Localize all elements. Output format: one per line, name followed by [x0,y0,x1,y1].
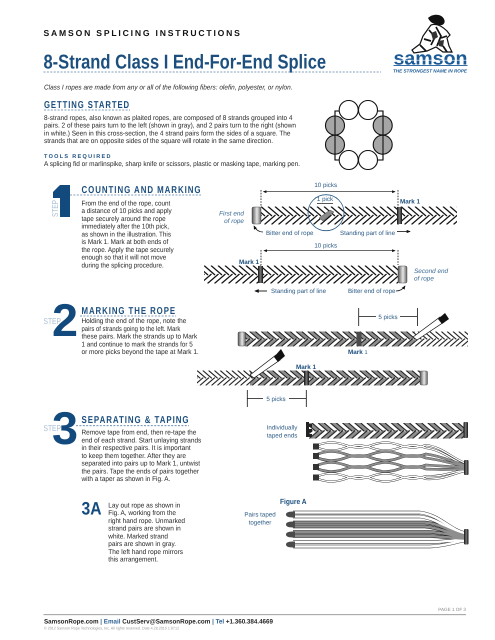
dimension: 5 picks: 5 picks [266,396,286,403]
rope [245,332,415,346]
end cap [464,529,468,544]
dimension: 10 picks [261,182,398,207]
icon: marker pen [413,313,449,340]
label: first end: of rope [224,218,244,225]
tools heading: TOOLS REQUIRED [44,154,111,160]
taped ends [313,444,319,480]
diagram: taped rope [267,422,468,440]
label: first end: First end [219,210,244,217]
heading: SEPARATING & TAPING [82,415,190,426]
step number: 3A [82,498,102,518]
rope [197,370,250,386]
label: pairs taped together: together [249,519,271,526]
label: bitter end [348,286,405,295]
body text: immediately after the 10th pick, [82,224,169,231]
logo: Samson [393,15,468,74]
body text: tape securely around the rope [82,216,166,223]
label: standing part: Standing part of line [271,288,327,295]
page number: PAGE 1 OF 3 [438,607,466,612]
diagram: marking rope, second end [197,349,428,407]
body text: pairs. 2 of these pairs turn to the left (shown in gray), and 2 pairs turn to the right (shown [44,123,296,130]
label: pairs taped together: Pairs taped [244,511,276,518]
mark band [258,266,263,283]
label: bitter end: Bitter end of rope [348,288,396,295]
body text [44,115,296,145]
step 1 [52,185,201,269]
body text: or more picks beyond the tape at Mark 1. [82,349,199,356]
diagram: unlaid strand pairs [313,442,468,482]
body text: with a taper as shown in Fig. A. [81,476,170,483]
body text: is Mark 1. Mark at both ends of [82,239,168,246]
body text: the rope. Apply the tape securely [82,247,174,254]
label: mark 1: Mark 1 [400,198,420,205]
body text: this arrangement. [108,556,158,564]
end cap [464,422,468,438]
body text: to keep them together. After they are [82,453,186,460]
diagram: second end of rope [204,243,449,295]
step 3 [44,402,202,483]
body text: Holding the end of the rope, note the [82,318,186,325]
label: standing part: Standing part of line [340,230,396,237]
body text: end of each strand. Start unlaying strands [82,437,202,444]
dimension: 10 picks [261,243,398,265]
heading: COUNTING AND MARKING [82,185,202,196]
step label: STEP [44,316,61,326]
dimension: 5 picks [247,390,306,407]
body text: The left hand rope mirrors [108,549,184,556]
step label: STEP [50,200,60,217]
body text: separated into pairs up to Mark 1, untwist [82,461,200,468]
white outer strands [318,442,465,482]
label: second end [414,268,449,282]
taped tips [286,512,295,548]
title: 8-Strand Class I End-For-End Splice [44,52,326,74]
body text [82,200,174,269]
taped ends [306,422,312,437]
body text: 8-strand ropes, also known as plaited ropes, are composed of 8 strands grouped into 4 [44,115,293,122]
mark band [356,332,362,346]
body text [81,430,202,483]
mark band [397,207,402,224]
rope [261,206,457,224]
body text: pairs of strands going to the left. Mark [82,326,181,333]
body text: as shown in the illustration. This [82,231,172,238]
end cap [238,332,246,346]
section: getting started [44,100,300,168]
body text: strand pairs are shown in [108,526,181,532]
step number: 3 [52,402,78,454]
strand pairs [293,512,465,546]
tools text: A splicing fid or marlinspike, sharp knife or scissors, plastic or masking tape, marking pen. [44,161,300,168]
wordmark: samson [394,49,468,70]
dimension: 5 picks [359,308,418,326]
header label: SAMSON SPLICING INSTRUCTIONS [44,28,242,38]
body text: a distance of 10 picks and apply [82,208,172,215]
footer contact: SamsonRope.com | Email CustServ@SamsonRope.com | Tel +1.360.384.4669 [44,618,273,625]
label: bitter end [254,226,314,237]
footer copyright: © 2012 Samson Rope Technologies, Inc. All rights reserved. Date 4.28.2015 1:0712 [44,626,179,631]
body text: Remove tape from end, then re-tape the [82,430,196,437]
diagram: marking rope, first end [238,308,468,356]
one pick callout: 1 pick [317,196,334,203]
label: bitter end: Bitter end of rope [266,230,314,237]
rope [309,423,464,439]
diagram: cross-section [326,100,392,170]
body text: From the end of the rope, count [82,200,170,207]
body text: the pairs. Tape the ends of pairs together [82,468,200,475]
body text [107,502,185,564]
label: individually taped ends [267,424,298,440]
gray inner strands [318,452,465,472]
step number [53,185,70,217]
body text: these pairs. Mark the strands up to Mark [82,334,198,341]
body text: right hand rope. Unmarked [108,518,185,525]
intro line: Class I ropes are made from any or all of the following fibers: olefin, polyester, or nylon. [44,84,293,91]
mark band [304,371,309,385]
label: mark 1: Mark 1 [348,349,368,356]
label: first end [219,210,244,225]
body text: Lay out rope as shown in [108,502,180,509]
label: individually taped ends: taped ends [267,432,297,440]
end cap [252,207,261,224]
diagram: figure A [286,512,468,548]
label: mark 1: Mark 1 [239,259,259,266]
end cap [420,371,428,385]
icon: Hercules figure [412,15,452,53]
body text: strands that are on opposite sides of the square will rotate in the same direction. [44,138,273,145]
label: individually taped ends: Individually [267,424,298,432]
figure A heading: Figure A [280,497,307,506]
label: second end: Second end [414,268,449,275]
body text: enough so that it will not move [82,255,166,262]
label: mark 1: Mark 1 [296,364,316,371]
body text: white. Marked strand [107,533,168,540]
diagram: first end of rope [219,182,457,237]
body text: Fig. A, working from the [108,510,176,517]
tagline: THE STRONGEST NAME IN ROPE [393,69,468,74]
icon: marker pen [250,349,285,378]
dimension: 5 picks: 5 picks [378,314,398,321]
step label: STEP [44,423,61,433]
body text: 1 and continue to mark the strands for 5 [82,342,193,348]
step number: 1 [44,175,76,227]
body text: in their respective pairs. It is important [82,445,191,452]
heading: MARKING THE ROPE [82,306,176,317]
step 2 [44,294,199,356]
body text: during the splicing procedure. [82,262,164,269]
rope [204,266,398,284]
body text: pairs are shown in gray. [108,541,176,548]
end cap [398,266,407,283]
label: second end: of rope [414,276,434,282]
dimension: 10 picks: 10 picks [314,182,337,189]
label: pairs taped together [244,511,276,526]
body text: in white.) Seen in this cross-section, the 4 strand pairs form the sides of a square. The [44,130,291,137]
end cap [464,460,468,475]
dimension: 10 picks: 10 picks [314,243,337,250]
step 3A [82,498,185,564]
body text [82,318,199,356]
step number: 2 [52,294,78,346]
one pick callout [308,195,344,231]
heading: GETTING STARTED [44,100,130,111]
